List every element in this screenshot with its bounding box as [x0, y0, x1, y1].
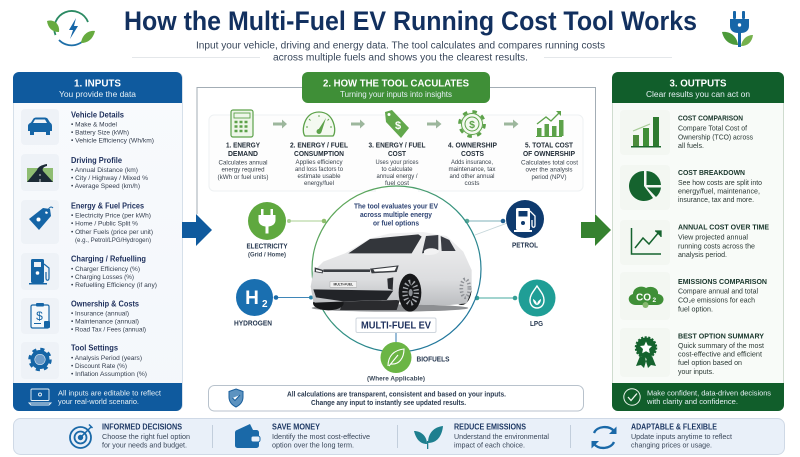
transparency note: Change any input to instantly see updated results. — [311, 400, 466, 407]
calculates header: Turning your inputs into insights — [340, 89, 452, 99]
output: annual cost over time: View projected annual — [678, 235, 748, 242]
input: energy and fuel prices: • Other Fuels (price per unit) — [71, 229, 153, 236]
benefit: adaptable and flexible: ADAPTABLE & FLEXIBLE — [631, 423, 717, 432]
outputs footer: Make confident, data-driven decisions — [647, 388, 771, 398]
step 2: energy or fuel consumption: 2. ENERGY / FUEL — [290, 142, 348, 150]
step 2: energy or fuel consumption: CONSUMPTION — [294, 151, 344, 158]
icon: green price tag: $ — [395, 120, 401, 132]
input: ownership and costs: • Road Tax / Fees (annual) — [71, 326, 146, 334]
benefits strip — [14, 418, 784, 454]
output: cost comparison: Compare Total Cost of — [678, 126, 747, 133]
icon: dollar gear: $ — [469, 119, 475, 131]
step 2: energy or fuel consumption: energy/fuel — [304, 181, 334, 187]
fuel: biofuels: BIOFUELS — [416, 356, 450, 364]
step 3: energy or fuel cost: fuel cost — [385, 181, 409, 187]
step 4: ownership costs: 4. OWNERSHIP — [448, 142, 497, 150]
input: tool settings — [21, 342, 147, 379]
output: cost breakdown: COST BREAKDOWN — [678, 168, 745, 177]
arrow — [504, 120, 518, 128]
output: emissions comparison: Compare annual and total — [678, 289, 758, 296]
arrow — [427, 120, 442, 128]
output: emissions comparison: EMISSIONS COMPARISON — [678, 277, 767, 286]
benefit: informed decisions: INFORMED DECISIONS — [102, 423, 182, 432]
fuel: electricity — [246, 202, 288, 258]
output: best option summary — [620, 328, 764, 377]
fuel: hydrogen: HYDROGEN — [234, 320, 272, 328]
benefit: informed decisions: for your needs and budget. — [102, 442, 187, 450]
panel: inputs — [13, 72, 182, 411]
inputs footer: your real-world scenario. — [58, 397, 139, 406]
output: emissions comparison: CO₂e emissions for each — [678, 298, 755, 305]
panel: how the tool calculates — [197, 72, 596, 214]
icon: shield — [229, 389, 243, 407]
benefit: adaptable and flexible — [592, 423, 732, 450]
icon: gear — [30, 350, 50, 370]
output: cost comparison: COST COMPARISON — [678, 114, 743, 122]
panel: outputs — [612, 72, 784, 411]
icon: co2 cloud: 2 — [652, 297, 656, 304]
output: annual cost over time: running costs across the — [678, 243, 755, 250]
icon: petrol pump — [514, 208, 535, 232]
inputs header: You provide the data — [59, 89, 136, 99]
input: charging and refuelling: • Charger Efficiency (%) — [71, 266, 140, 273]
icon: target — [70, 424, 92, 448]
transparency note — [208, 386, 584, 411]
step 1: energy demand: Calculates annual — [218, 160, 268, 166]
outputs footer — [612, 383, 784, 411]
icon: leaf — [388, 349, 404, 366]
benefit: reduce emissions: impact of each choice. — [454, 442, 525, 450]
output: best option summary: BEST OPTION SUMMARY — [678, 332, 764, 340]
output: emissions comparison — [620, 272, 767, 320]
step 1: energy demand — [218, 110, 268, 181]
input: ownership and costs: • Insurance (annual) — [71, 310, 129, 318]
benefit: save money — [235, 423, 370, 450]
icon: gauge — [303, 112, 335, 136]
hub caption — [354, 204, 438, 227]
icon: bar chart — [631, 117, 661, 148]
input: vehicle details — [21, 109, 154, 145]
input: charging and refuelling: • Charging Losses (%) — [71, 274, 134, 281]
arrow: inputs to tool — [182, 214, 212, 246]
input: energy and fuel prices: (e.g., Petrol/LPG/Hydrogen) — [75, 237, 151, 244]
step 5: total cost of ownership — [521, 111, 578, 181]
input: tool settings: • Discount Rate (%) — [71, 363, 127, 370]
step 5: total cost of ownership: period (NPV) — [532, 175, 566, 181]
step 3: energy or fuel cost: annual energy / — [376, 174, 418, 180]
input: energy and fuel prices: • Home / Public Split % — [71, 220, 138, 228]
benefit: save money: option over the long term. — [272, 442, 354, 450]
output: annual cost over time — [620, 220, 769, 265]
step 3: energy or fuel cost: Uses your prices — [376, 160, 418, 166]
step 2: energy or fuel consumption — [290, 112, 348, 187]
input: vehicle details: • Battery Size (kWh) — [71, 130, 129, 136]
icon: price tag — [29, 207, 53, 230]
input: tool settings: • Inflation Assumption (%) — [71, 371, 147, 378]
output: cost breakdown: See how costs are split into — [678, 180, 762, 187]
input: charging and refuelling: • Refuelling Efficiency (if any) — [71, 282, 157, 289]
hub ring — [312, 186, 481, 352]
fuel: petrol — [506, 200, 544, 250]
fuel: biofuels: (Where Applicable) — [367, 376, 425, 382]
calculates header: 2. HOW THE TOOL CACULATES — [323, 78, 469, 90]
input: energy and fuel prices: Energy & Fuel Prices — [71, 202, 145, 210]
icon: co2 cloud: CO — [636, 292, 651, 304]
hub label — [356, 318, 436, 332]
icon: check circle — [624, 389, 640, 405]
step 4: ownership costs — [448, 112, 497, 187]
step 1: energy demand: (kWh or fuel units) — [218, 175, 268, 181]
subtitle: Input your vehicle, driving and energy data. The tool calculates and compares running costs — [196, 40, 605, 52]
input: driving profile: • Average Speed (km/h) — [71, 183, 140, 190]
input: ownership and costs — [21, 298, 146, 334]
hub caption: across multiple energy — [360, 212, 432, 219]
step 2: energy or fuel consumption: estimate usable — [298, 174, 341, 180]
step 3: energy or fuel cost: COST — [388, 151, 407, 158]
step 3: energy or fuel cost: to calculate — [382, 167, 413, 173]
input: driving profile — [21, 154, 148, 191]
car illustration — [311, 232, 472, 312]
benefit: reduce emissions: REDUCE EMISSIONS — [454, 423, 526, 432]
input: vehicle details: • Vehicle Efficiency (Wh/km) — [71, 138, 154, 144]
output: cost breakdown: insurance, tax and more. — [678, 197, 754, 204]
outputs footer: with clarity and confidence. — [646, 397, 738, 406]
icon: plug and leaves logo — [722, 11, 753, 47]
output: best option summary: fuel option based on — [678, 360, 742, 367]
output: cost breakdown: energy/fuel, maintenance, — [678, 188, 760, 195]
output: best option summary: Quick summary of the most — [678, 343, 764, 350]
icon: road — [27, 164, 53, 182]
icon: bolt and leaves logo — [47, 11, 95, 45]
hub label: MULTI-FUEL EV — [361, 320, 431, 332]
step 5: total cost of ownership: Calculates total cost — [521, 160, 578, 166]
benefit: save money: SAVE MONEY — [272, 423, 321, 432]
output: annual cost over time: analysis period. — [678, 252, 727, 259]
input: ownership and costs: • Maintenance (annual) — [71, 318, 139, 326]
input: driving profile: • Annual Distance (km) — [71, 167, 138, 174]
inputs footer: All inputs are editable to reflect — [58, 388, 161, 398]
icon: line chart — [632, 228, 661, 254]
step 3: energy or fuel cost: 3. ENERGY / FUEL — [368, 142, 426, 150]
step 4: ownership costs: costs — [464, 181, 480, 187]
fuel: hydrogen: 2 — [262, 299, 268, 310]
output: best option summary: cost-effective and efficient — [678, 351, 762, 358]
arrow — [273, 120, 287, 128]
icon: document with dollar: $ — [36, 309, 43, 323]
subtitle — [132, 40, 672, 64]
input: tool settings: • Analysis Period (years) — [71, 355, 142, 362]
hub caption: The tool evaluates your EV — [354, 204, 438, 210]
steps card — [209, 110, 583, 191]
benefit: adaptable and flexible: Update inputs anytime to reflect — [631, 434, 732, 441]
step 5: total cost of ownership: OF OWNERSHIP — [523, 151, 575, 158]
step 1: energy demand: energy required — [222, 168, 264, 174]
icon: pie chart — [629, 171, 661, 201]
inputs header — [13, 72, 182, 103]
benefit: informed decisions — [70, 423, 190, 450]
input: ownership and costs: Ownership & Costs — [71, 300, 140, 308]
output: best option summary: your inputs. — [678, 369, 714, 376]
diagram: multi-fuel hub — [234, 186, 556, 382]
calculates header — [302, 72, 490, 103]
input: energy and fuel prices: • Electricity Price (per kWh) — [71, 212, 151, 220]
icon: refresh arrows — [592, 426, 616, 448]
transparency note: All calculations are transparent, consistent and based on your inputs. — [287, 391, 506, 398]
benefit: save money: Identify the most cost-effective — [272, 434, 370, 441]
icon: award medal — [636, 338, 656, 368]
benefit: reduce emissions: Understand the environmental — [454, 434, 549, 441]
step 5: total cost of ownership: over the analysis — [526, 168, 572, 174]
step 5: total cost of ownership: 5. TOTAL COST — [525, 142, 574, 150]
icon: car — [28, 118, 52, 135]
output: annual cost over time: ANNUAL COST OVER TIME — [678, 222, 769, 232]
step 3: energy or fuel cost — [368, 110, 426, 187]
step 4: ownership costs: COSTS — [461, 151, 484, 158]
output: cost comparison: all fuels. — [678, 143, 704, 150]
icon: calculator — [231, 110, 253, 137]
input: charging and refuelling: Charging / Refuelling — [71, 254, 146, 264]
icon: fuel pump — [29, 259, 49, 284]
hub caption: or fuel options — [373, 220, 419, 227]
output: emissions comparison: fuel option. — [678, 306, 713, 313]
benefit: reduce emissions — [414, 423, 549, 450]
benefit: adaptable and flexible: changing prices or usage. — [631, 442, 712, 450]
fuel: petrol: PETROL — [512, 242, 539, 250]
input: vehicle details: • Make & Model — [71, 122, 117, 128]
output: cost comparison: Ownership (TCO) across — [678, 134, 753, 141]
icon: wallet — [235, 424, 260, 448]
fuel: lpg: LPG — [530, 321, 544, 328]
output: cost breakdown — [620, 165, 762, 210]
benefit: informed decisions: Choose the right fuel option — [102, 434, 190, 441]
step 2: energy or fuel consumption: and loss factors to — [295, 167, 344, 173]
step 2: energy or fuel consumption: Applies efficiency — [296, 160, 342, 166]
fuel: electricity: ELECTRICITY — [246, 244, 288, 250]
inputs footer — [13, 383, 182, 411]
input: charging and refuelling — [21, 253, 157, 290]
step 4: ownership costs: Adds insurance, — [451, 160, 493, 166]
step 4: ownership costs: maintenance, tax — [448, 167, 496, 173]
connector lines — [274, 219, 517, 342]
input: driving profile: • City / Highway / Mixed % — [71, 175, 148, 182]
fuel: electricity: (Grid / Home) — [248, 252, 286, 258]
icon: laptop — [29, 389, 51, 405]
fuel: hydrogen: H — [245, 288, 259, 309]
input: vehicle details: Vehicle Details — [71, 110, 125, 120]
icon: teal leaves — [414, 426, 443, 449]
icon: drop with leaf — [530, 286, 544, 308]
input: tool settings: Tool Settings — [71, 344, 119, 352]
icon: plug — [258, 209, 276, 234]
outputs header: 3. OUTPUTS — [670, 78, 727, 90]
arrow: tool to outputs — [581, 214, 611, 246]
step 1: energy demand: DEMAND — [228, 151, 258, 158]
step 1: energy demand: 1. ENERGY — [226, 142, 260, 150]
outputs header: Clear results you can act on — [646, 89, 750, 99]
input: energy and fuel prices — [21, 200, 153, 244]
icon: co2 cloud — [629, 287, 664, 308]
inputs header: 1. INPUTS — [74, 78, 121, 90]
title: How the Multi-Fuel EV Running Cost Tool Works — [124, 6, 697, 36]
arrow — [351, 120, 365, 128]
step 4: ownership costs: and other annual — [450, 174, 494, 180]
fuel: hydrogen — [234, 279, 273, 328]
fuel: lpg — [518, 280, 556, 328]
outputs header — [612, 72, 784, 103]
subtitle: across multiple fuels and shows you the clearest results. — [273, 52, 528, 64]
input: driving profile: Driving Profile — [71, 156, 123, 165]
fuel: biofuels — [367, 342, 450, 382]
car illustration: MULTI-FUEL — [333, 283, 353, 287]
icon: rising bars — [536, 111, 564, 137]
output: cost comparison — [620, 110, 753, 155]
